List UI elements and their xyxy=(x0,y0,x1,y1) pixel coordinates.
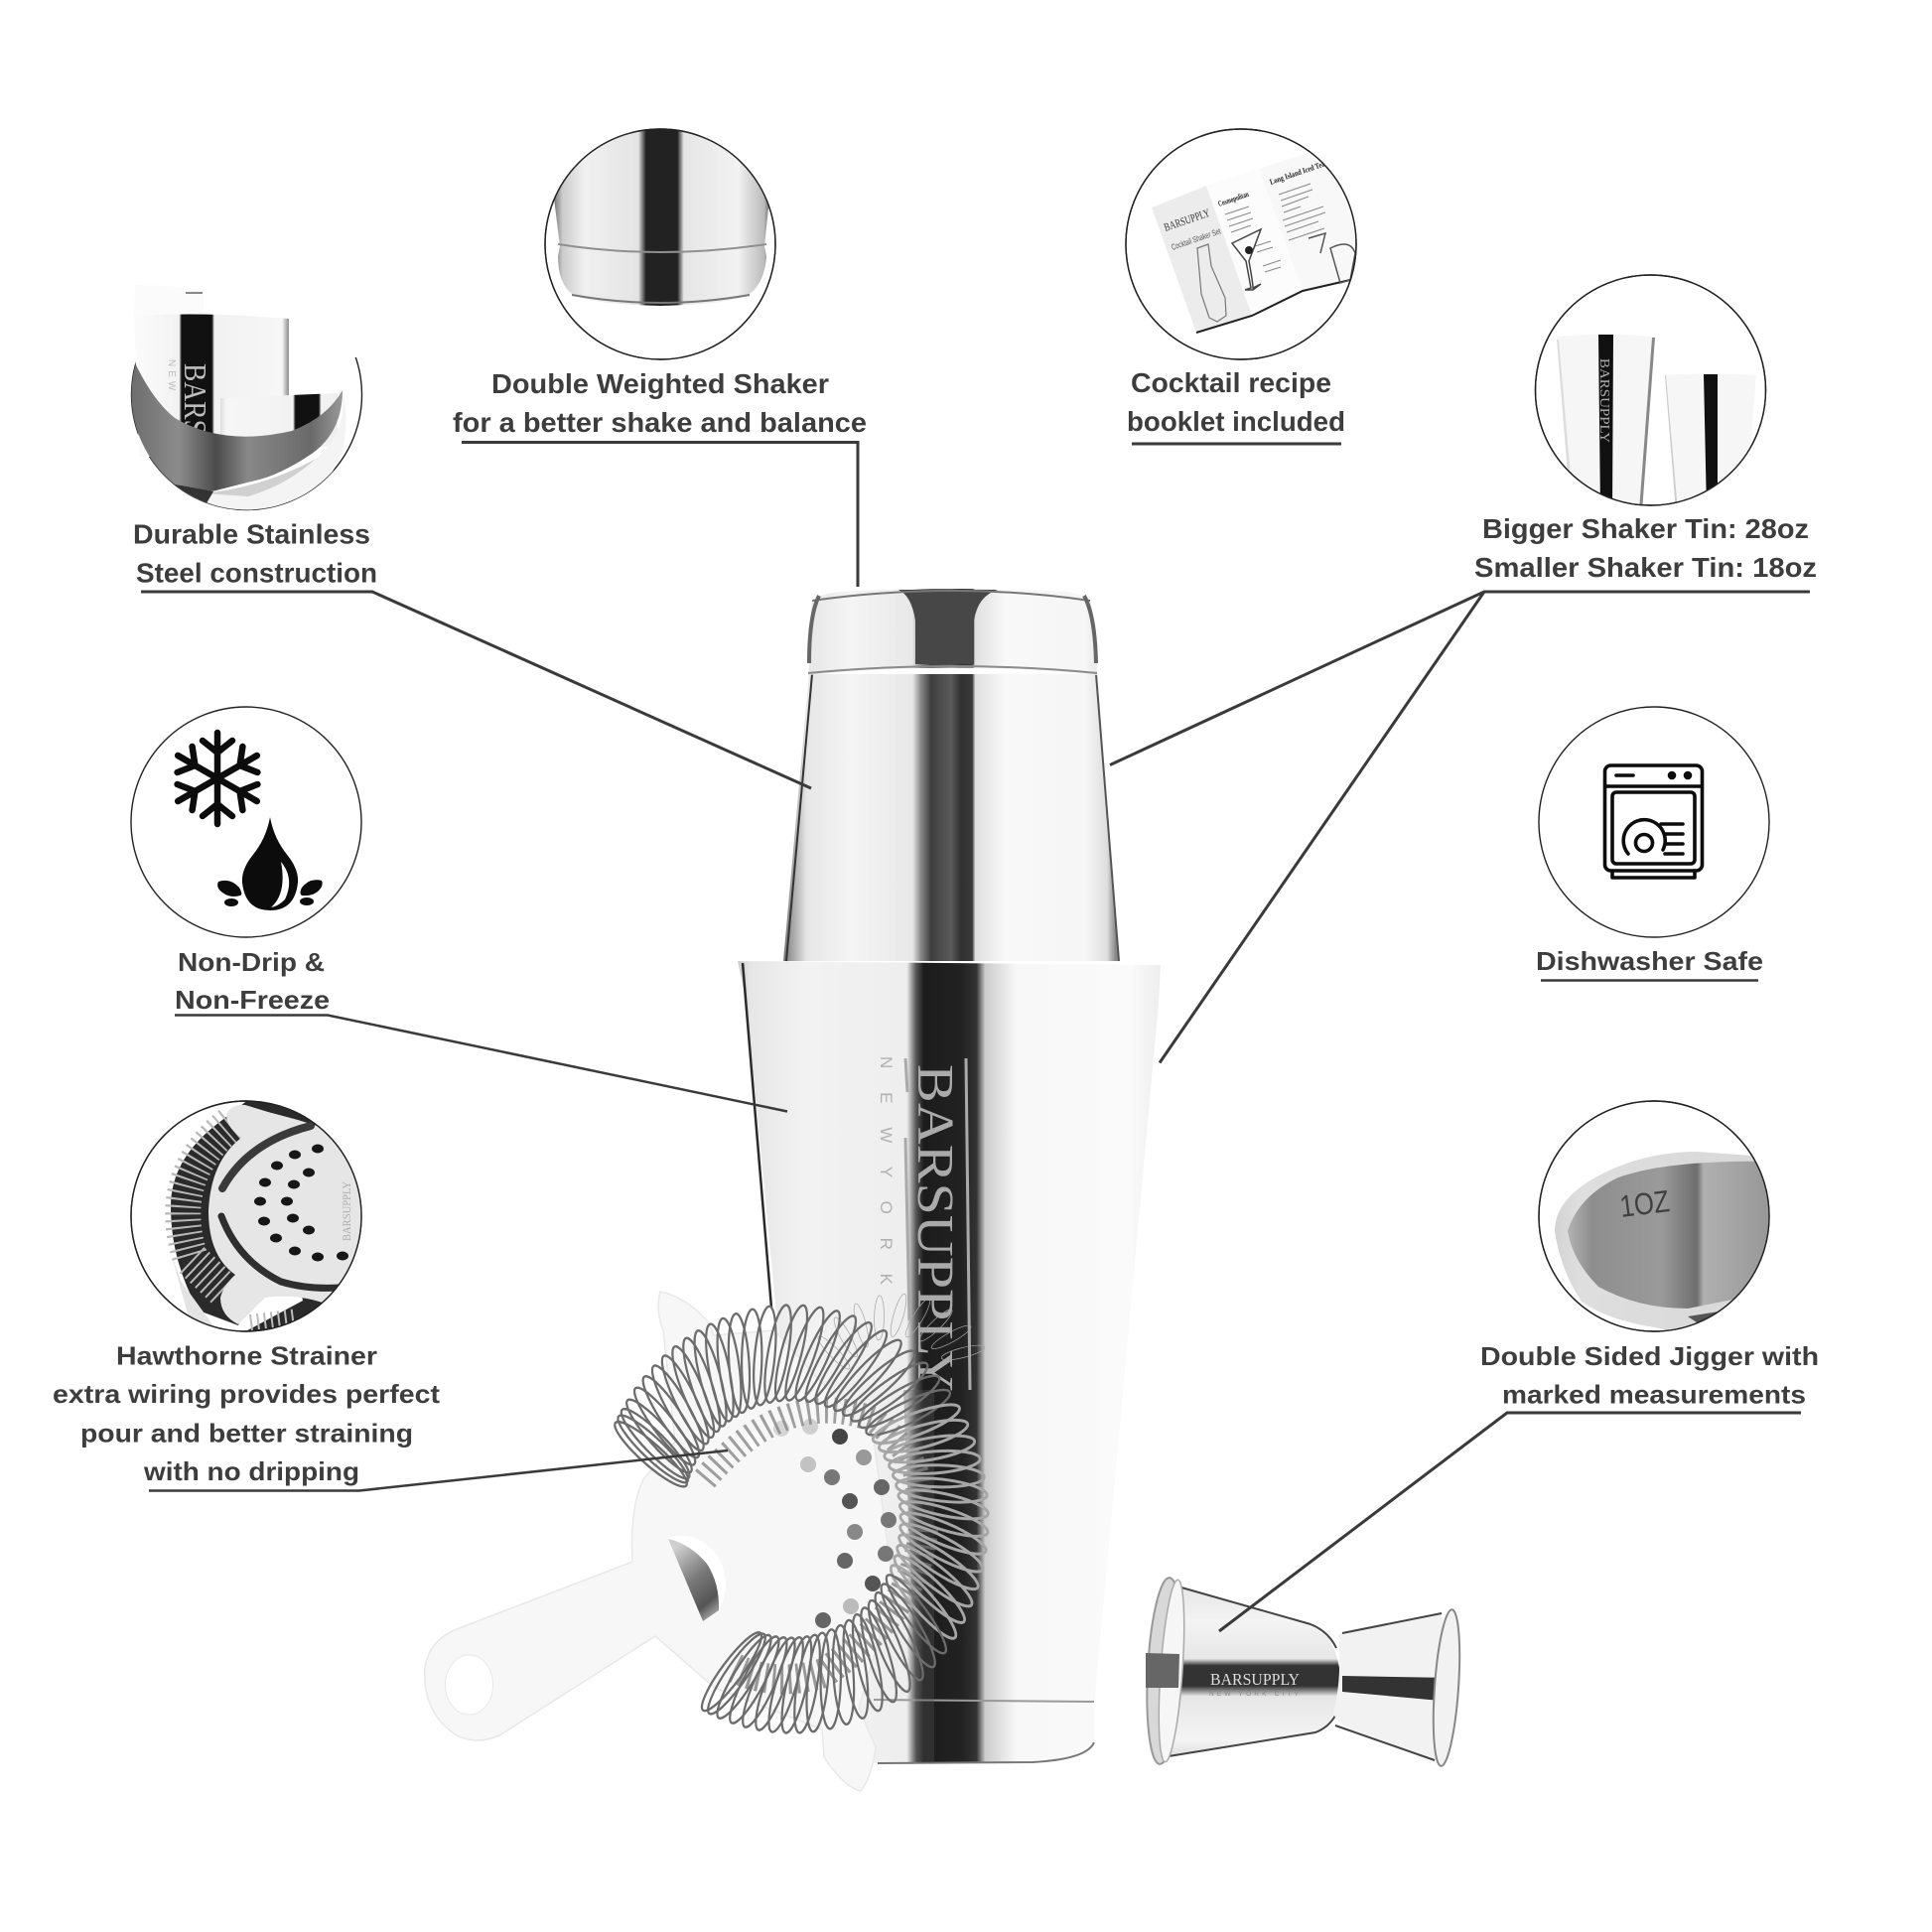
photo circle: jigger interior xyxy=(1539,1101,1777,1335)
icon circle xyxy=(1539,707,1769,937)
label: double sided jigger: Double Sided Jigger with xyxy=(1480,1341,1819,1371)
label: double weighted shaker: for a better shake and balance xyxy=(453,407,867,438)
large cup body xyxy=(1169,1587,1339,1757)
rear coil xyxy=(809,1293,988,1373)
icon: water drop with splashes xyxy=(217,817,323,910)
label: hawthorne strainer description: with no dripping xyxy=(143,1456,359,1486)
wire coil xyxy=(600,1302,992,1736)
label: non-drip and non-freeze: Non-Drip & xyxy=(178,947,325,977)
photo circle: recipe booklet: BARSUPPLY xyxy=(1163,207,1212,234)
callout: non-drip and non-freeze xyxy=(131,707,787,1112)
callout: tin sizes xyxy=(1110,275,1817,1062)
photo circle: recipe booklet: Cocktail Shaker Set xyxy=(1170,225,1222,252)
label: double weighted shaker: Double Weighted Shaker xyxy=(491,368,829,399)
leader line xyxy=(1219,1413,1801,1631)
leader line xyxy=(462,443,858,587)
callout: durable steel xyxy=(119,276,811,788)
plate holes xyxy=(747,1419,897,1628)
label: hawthorne strainer description: Hawthorne Strainer xyxy=(116,1340,377,1370)
icon: snowflake xyxy=(171,733,264,824)
label: durable stainless steel construction: Durable Stainless xyxy=(133,518,370,550)
product: hawthorne strainer xyxy=(425,1292,992,1791)
lower shaker tin xyxy=(738,961,1161,1763)
jigger logo xyxy=(1209,1670,1300,1698)
photo circle: stainless steel: NEW xyxy=(166,359,177,394)
strainer slots xyxy=(222,1126,311,1188)
plate shadow fins xyxy=(705,1411,918,1489)
icon circle xyxy=(131,707,361,937)
jigger rims xyxy=(1143,1577,1186,1765)
label: dishwasher safe: Dishwasher Safe xyxy=(1536,946,1763,976)
callout: dishwasher safe xyxy=(1536,707,1769,981)
photo circle: stainless steel xyxy=(131,292,363,510)
label: hawthorne strainer description: extra wiring provides perfect xyxy=(53,1379,440,1409)
underline xyxy=(1541,979,1758,982)
callout: recipe booklet xyxy=(1126,129,1358,444)
photo circle: strainer detail xyxy=(131,1092,367,1335)
infographic: shaker set features xyxy=(54,128,1817,1792)
label: hawthorne strainer description xyxy=(53,1340,440,1486)
label: durable stainless steel construction xyxy=(133,518,377,588)
label: double sided jigger: marked measurements xyxy=(1502,1380,1806,1410)
leader line xyxy=(141,592,811,788)
leader lines xyxy=(1110,592,1810,1062)
underline xyxy=(1132,443,1341,445)
label: double weighted shaker xyxy=(453,368,867,438)
label: cocktail recipe booklet: Cocktail recipe xyxy=(1131,367,1331,398)
small cup body xyxy=(1333,1613,1451,1760)
photo circle: stainless steel: BARS xyxy=(178,363,213,435)
callout: double weighted shaker xyxy=(453,119,867,587)
product: double sided jigger xyxy=(1143,1577,1463,1767)
strainer holes xyxy=(254,1144,348,1261)
strainer plate xyxy=(208,1105,367,1324)
callout: hawthorne strainer xyxy=(53,1092,728,1491)
label: double sided jigger xyxy=(1480,1341,1819,1410)
label: non-drip and non-freeze: Non-Freeze xyxy=(175,985,330,1015)
photo circle: recipe booklet xyxy=(1126,129,1358,359)
callout: double sided jigger xyxy=(1219,1101,1819,1631)
label: tin capacities xyxy=(1474,513,1817,583)
strainer plate and handle xyxy=(425,1292,894,1791)
label: cocktail recipe booklet: booklet included xyxy=(1127,406,1345,437)
label: hawthorne strainer description: pour and better straining xyxy=(80,1418,413,1448)
leader line xyxy=(175,1015,787,1112)
photo circle: jigger interior: 1OZ xyxy=(1618,1183,1671,1224)
leader line xyxy=(149,1450,728,1491)
label: cocktail recipe booklet xyxy=(1127,367,1345,437)
icon: dishwasher xyxy=(1604,765,1702,878)
label: tin capacities: Bigger Shaker Tin: 28oz xyxy=(1482,513,1809,544)
strainer slot xyxy=(668,1536,726,1621)
label: durable stainless steel construction: Steel construction xyxy=(136,558,377,588)
upper shaker tin xyxy=(783,674,1119,961)
photo circle: shaker base xyxy=(545,119,775,359)
product: main shaker xyxy=(738,589,1161,1763)
handle eyelet xyxy=(445,1655,492,1715)
engraved logo xyxy=(877,1056,970,1392)
engraved logo: N E W Y O R K xyxy=(877,1056,896,1286)
label: non-drip and non-freeze xyxy=(175,947,330,1015)
engraved logo: BARSUPPLY xyxy=(906,1064,963,1392)
photo circle: two shaker tins xyxy=(1535,275,1765,511)
photo circle: two shaker tins: BARSUPPLY xyxy=(1596,358,1611,443)
photo circle: recipe booklet: Long Island Iced Tea xyxy=(1269,159,1325,187)
photo circle: recipe booklet: Cosmopolitan xyxy=(1217,190,1250,208)
label: tin capacities: Smaller Shaker Tin: 18oz xyxy=(1474,552,1817,583)
jigger logo: BARSUPPLY xyxy=(1210,1670,1300,1689)
photo circle: strainer detail: BARSUPPLY xyxy=(340,1181,353,1241)
shaker lid xyxy=(808,589,1097,675)
jigger logo: NEW YORK CITY xyxy=(1209,1691,1300,1698)
